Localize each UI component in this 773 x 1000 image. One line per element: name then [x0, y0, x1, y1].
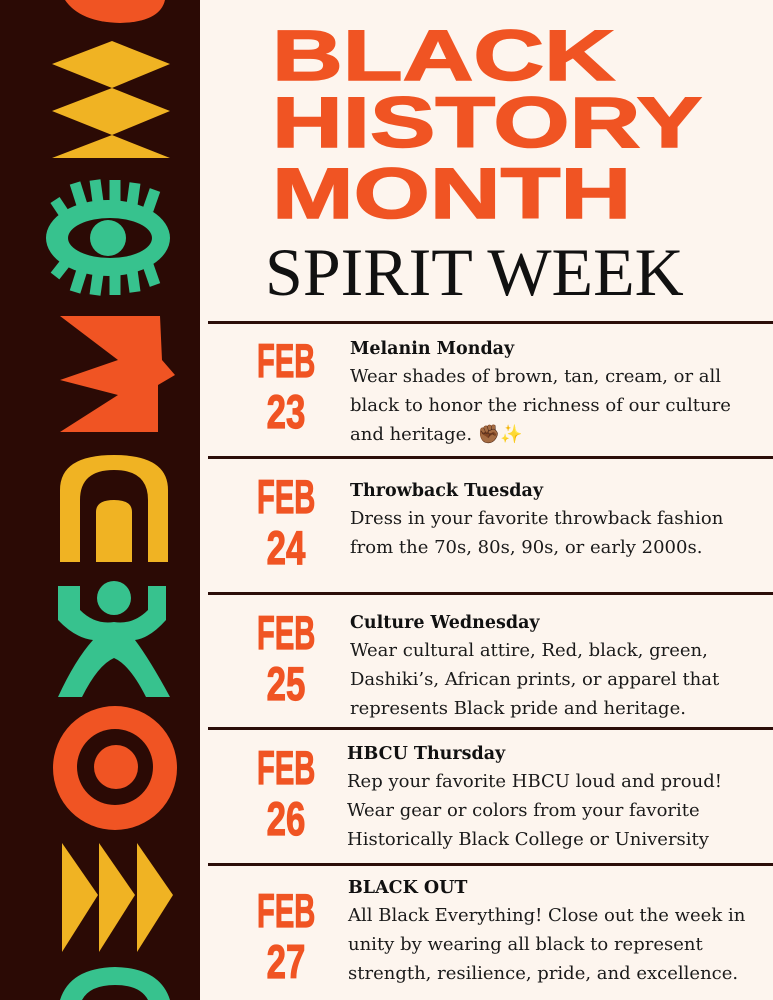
text [348, 878, 745, 984]
date: FEB [257, 741, 315, 794]
date [257, 741, 315, 845]
title [265, 17, 702, 310]
icon: orange top shape [65, 0, 165, 23]
text: Culture Wednesday [350, 613, 540, 633]
date: FEB [257, 606, 315, 659]
text: All Black Everything! Close out the week in [348, 905, 745, 926]
text [350, 613, 720, 719]
title: HISTORY [272, 84, 702, 163]
date: 23 [267, 385, 305, 438]
date: 26 [267, 792, 305, 845]
date: 25 [267, 657, 305, 710]
row: Feb 23 [257, 334, 731, 445]
text: represents Black pride and heritage. [350, 698, 686, 719]
text [347, 744, 722, 850]
date [257, 884, 315, 988]
text: Dashiki’s, African prints, or apparel that [350, 669, 719, 690]
row: Feb 25 [257, 606, 720, 719]
date: FEB [257, 470, 315, 523]
text: Dress in your favorite throwback fashion [350, 508, 723, 529]
date [257, 470, 315, 574]
text: Wear cultural attire, Red, black, green, [350, 640, 708, 661]
text: HBCU Thursday [347, 744, 505, 764]
text: strength, resilience, pride, and excellence. [348, 963, 738, 984]
date: FEB [257, 334, 315, 387]
text: Historically Black College or University [347, 829, 709, 850]
text: Rep your favorite HBCU loud and proud! [347, 771, 722, 792]
text: Melanin Monday [350, 339, 514, 359]
text [350, 481, 723, 558]
text: BLACK OUT [348, 878, 467, 898]
date [257, 334, 315, 438]
icon: yellow diamonds [52, 41, 170, 158]
text: Wear shades of brown, tan, cream, or all [350, 366, 721, 387]
date: 24 [267, 521, 305, 574]
text: black to honor the richness of our culture [350, 395, 731, 416]
icon: green arc bottom [60, 967, 170, 1000]
title: MONTH [272, 155, 631, 234]
icon: orange ring [53, 706, 177, 830]
text: from the 70s, 80s, 90s, or early 2000s. [350, 537, 702, 558]
text [350, 339, 731, 445]
date: FEB [257, 884, 315, 937]
decorative strip [0, 0, 200, 1000]
date [257, 606, 315, 710]
row: Feb 24 [257, 470, 723, 574]
text: unity by wearing all black to represent [348, 934, 703, 955]
text: Throwback Tuesday [350, 481, 543, 501]
row: Feb 26 [257, 741, 722, 850]
date: 27 [267, 935, 305, 988]
title: BLACK [272, 17, 615, 96]
text: Wear gear or colors from your favorite [347, 800, 700, 821]
icon: green figure [58, 581, 170, 697]
icon: orange bird [60, 316, 175, 432]
icon: green eye [46, 180, 170, 295]
subtitle: SPIRIT WEEK [265, 234, 684, 310]
icon: yellow arch [60, 455, 168, 562]
text: and heritage. ✊🏾✨ [350, 424, 523, 445]
icon: yellow triangles [62, 843, 173, 952]
row: Feb 27 [257, 878, 745, 988]
